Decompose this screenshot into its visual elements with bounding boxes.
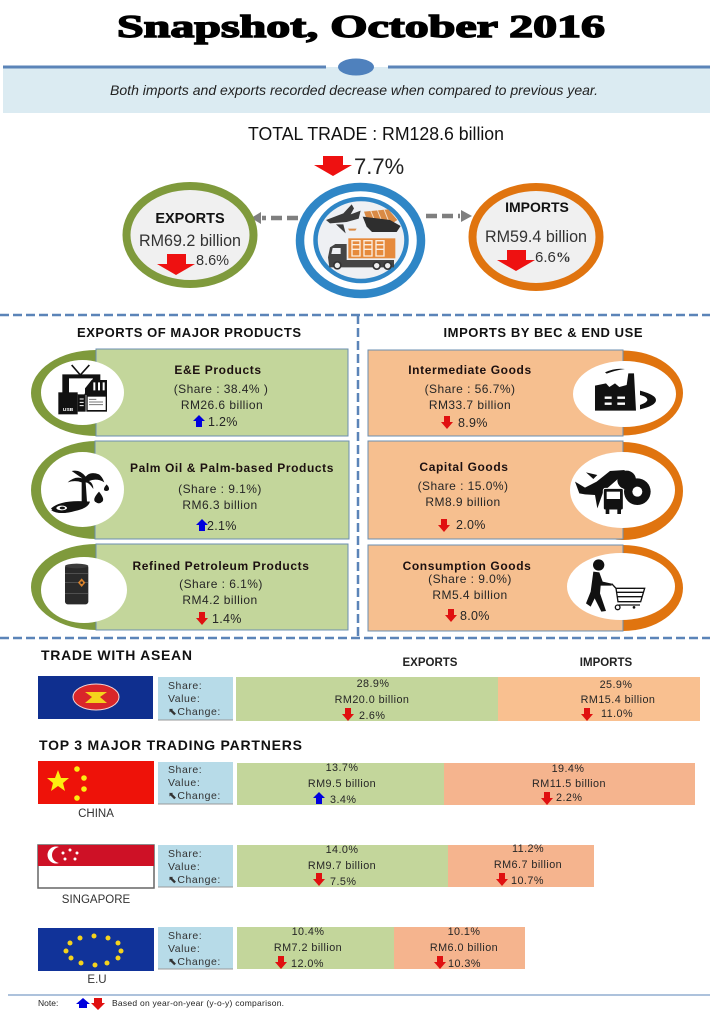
column heading: exports: EXPORTS bbox=[403, 657, 458, 669]
icon: electronics: USB bbox=[63, 407, 74, 413]
bar: ASEAN imports: 25.9% bbox=[600, 679, 632, 691]
bar: Singapore exports: 7.5% bbox=[330, 876, 356, 888]
row labels: ASEAN: ⬉Change: bbox=[168, 706, 221, 718]
heading: trade with ASEAN: TRADE WITH ASEAN bbox=[41, 647, 192, 663]
row labels: Singapore: ⬉Change: bbox=[168, 874, 221, 886]
row labels: ASEAN: Share: bbox=[168, 680, 202, 692]
icon: plane, bus and gear bbox=[575, 470, 651, 514]
panel: intermediate goods: RM33.7 billion bbox=[429, 398, 511, 412]
panel: intermediate goods: (Share : 56.7%) bbox=[425, 382, 515, 396]
imports circle: RM59.4 billion bbox=[485, 228, 587, 246]
row labels: China: ⬉Change: bbox=[168, 790, 221, 802]
bar: Singapore imports: RM6.7 billion bbox=[494, 859, 562, 871]
panel: consumption goods: 8.0% bbox=[460, 609, 490, 623]
imports circle: IMPORTS bbox=[505, 199, 569, 215]
row labels: China: Value: bbox=[168, 777, 200, 789]
panel: refined petroleum: 1.4% bbox=[212, 612, 242, 626]
bar: China exports: RM9.5 billion bbox=[308, 778, 376, 790]
row labels: China: Share: bbox=[168, 764, 202, 776]
title: Snapshot, October 2016 bbox=[117, 8, 605, 44]
panel: refined petroleum bbox=[31, 544, 348, 630]
label: EU: E.U bbox=[87, 974, 107, 986]
bar: China imports: 19.4% bbox=[552, 763, 584, 775]
label: Singapore: SINGAPORE bbox=[62, 894, 131, 906]
panel: refined petroleum: Refined Petroleum Products bbox=[133, 559, 309, 573]
panel: E&E products: (Share : 38.4% ) bbox=[174, 382, 268, 396]
bar: ASEAN exports: 2.6% bbox=[359, 710, 385, 722]
footer note: Based on year-on-year (y-o-y) comparison. bbox=[112, 998, 284, 1008]
flag: China bbox=[38, 761, 154, 804]
flag: ASEAN bbox=[38, 676, 153, 719]
footer note: Note: bbox=[38, 998, 58, 1008]
panel: capital goods: Capital Goods bbox=[419, 460, 509, 474]
bar: ASEAN imports bbox=[498, 677, 700, 721]
panel: consumption goods: (Share : 9.0%) bbox=[428, 572, 512, 586]
panel: consumption goods: RM5.4 billion bbox=[432, 588, 508, 602]
row labels: EU bbox=[158, 927, 233, 970]
bar: China exports: 13.7% bbox=[326, 762, 358, 774]
bar: China imports: 2.2% bbox=[556, 792, 582, 804]
row labels: China bbox=[158, 762, 233, 805]
icon: ship bbox=[348, 209, 401, 232]
panel: E&E products: 1.2% bbox=[208, 415, 238, 429]
row labels: EU: ⬉Change: bbox=[168, 956, 221, 968]
icon: oil barrel bbox=[65, 564, 88, 604]
bar: ASEAN exports: 28.9% bbox=[357, 678, 389, 690]
total trade heading: TOTAL TRADE : RM128.6 billion bbox=[248, 124, 504, 144]
panel: intermediate goods bbox=[368, 350, 683, 436]
bar: EU exports: 12.0% bbox=[291, 958, 324, 970]
panel: capital goods: RM8.9 billion bbox=[425, 495, 501, 509]
heading: imports by BEC: IMPORTS BY BEC & END USE bbox=[444, 325, 643, 340]
panel: E&E products bbox=[31, 349, 348, 436]
panel: E&E products: RM26.6 billion bbox=[181, 398, 263, 412]
panel: palm oil: 2.1% bbox=[207, 519, 237, 533]
panel: palm oil: RM6.3 billion bbox=[182, 498, 258, 512]
panel: refined petroleum: (Share : 6.1%) bbox=[179, 577, 263, 591]
row labels: Singapore: Share: bbox=[168, 848, 202, 860]
icon: palm and oil drop bbox=[51, 471, 109, 513]
panel: E&E products: E&E Products bbox=[174, 363, 262, 377]
subtitle banner bbox=[3, 58, 710, 113]
bar: ASEAN exports: RM20.0 billion bbox=[335, 694, 409, 706]
heading: top 3 trading partners: TOP 3 MAJOR TRADING PARTNERS bbox=[39, 737, 302, 753]
subtitle banner: Both imports and exports recorded decrease when compared to previous year. bbox=[110, 82, 598, 98]
icon: factory bbox=[595, 369, 656, 411]
bar: China imports: RM11.5 billion bbox=[532, 778, 606, 790]
row labels: Singapore bbox=[158, 845, 233, 888]
icon: truck bbox=[328, 238, 395, 270]
panel: intermediate goods: Intermediate Goods bbox=[408, 363, 532, 377]
bar: EU imports: RM6.0 billion bbox=[430, 942, 498, 954]
heading: exports of major products: EXPORTS OF MAJOR PRODUCTS bbox=[77, 325, 301, 340]
imports circle bbox=[472, 187, 600, 287]
bar: EU exports bbox=[237, 926, 394, 970]
column heading: imports: IMPORTS bbox=[580, 657, 633, 669]
panel: consumption goods: Consumption Goods bbox=[403, 559, 531, 573]
section dividers bbox=[0, 315, 710, 638]
bar: EU imports bbox=[394, 926, 525, 970]
bar: Singapore exports bbox=[237, 844, 448, 888]
flag: Singapore bbox=[38, 845, 154, 888]
footer note bbox=[8, 995, 710, 1010]
total trade change bbox=[314, 154, 404, 179]
bar: Singapore imports: 10.7% bbox=[511, 875, 544, 887]
total trade change: 7.7% bbox=[354, 154, 404, 179]
centre trade icon bbox=[300, 187, 421, 294]
bar: Singapore exports: RM9.7 billion bbox=[308, 860, 376, 872]
row labels: ASEAN bbox=[158, 677, 233, 721]
bar: ASEAN imports: 11.0% bbox=[601, 708, 633, 720]
exports circle: EXPORTS bbox=[155, 211, 225, 227]
panel: capital goods bbox=[368, 441, 683, 540]
bar: Singapore imports: 11.2% bbox=[512, 843, 544, 855]
bar: China imports bbox=[444, 763, 695, 805]
panel: palm oil: (Share : 9.1%) bbox=[178, 482, 262, 496]
exports circle: RM69.2 billion bbox=[139, 232, 241, 250]
row labels: EU: Share: bbox=[168, 930, 202, 942]
panel: refined petroleum: RM4.2 billion bbox=[182, 593, 258, 607]
bar: China exports: 3.4% bbox=[330, 794, 356, 806]
panel: palm oil bbox=[31, 441, 349, 539]
icon: shopping trolley bbox=[586, 559, 645, 612]
exports circle: 8.6% bbox=[196, 253, 229, 269]
bar: ASEAN imports: RM15.4 billion bbox=[581, 694, 655, 706]
bar: ASEAN exports bbox=[236, 677, 498, 722]
bar: EU exports: RM7.2 billion bbox=[274, 942, 342, 954]
arrow: to imports bbox=[426, 210, 472, 222]
panel: capital goods: 2.0% bbox=[456, 518, 486, 532]
row labels: ASEAN: Value: bbox=[168, 693, 200, 705]
arrow: to exports bbox=[251, 212, 298, 224]
icon: electronics bbox=[58, 365, 107, 414]
exports circle bbox=[126, 186, 254, 284]
bar: EU exports: 10.4% bbox=[292, 926, 324, 938]
bar: EU imports: 10.3% bbox=[448, 958, 481, 970]
bar: EU imports: 10.1% bbox=[448, 926, 480, 938]
bar: Singapore exports: 14.0% bbox=[326, 844, 358, 856]
imports circle: 6.6% bbox=[535, 249, 571, 266]
label: China: CHINA bbox=[78, 808, 114, 820]
panel: consumption goods bbox=[368, 545, 683, 631]
icon: plane bbox=[326, 204, 361, 233]
panel: capital goods: (Share : 15.0%) bbox=[418, 479, 508, 493]
bar: China exports bbox=[237, 762, 444, 806]
panel: intermediate goods: 8.9% bbox=[458, 416, 488, 430]
flag: EU bbox=[38, 928, 154, 971]
panel: palm oil: Palm Oil & Palm-based Products bbox=[130, 461, 334, 475]
row labels: EU: Value: bbox=[168, 943, 200, 955]
row labels: Singapore: Value: bbox=[168, 861, 200, 873]
bar: Singapore imports bbox=[448, 843, 594, 887]
